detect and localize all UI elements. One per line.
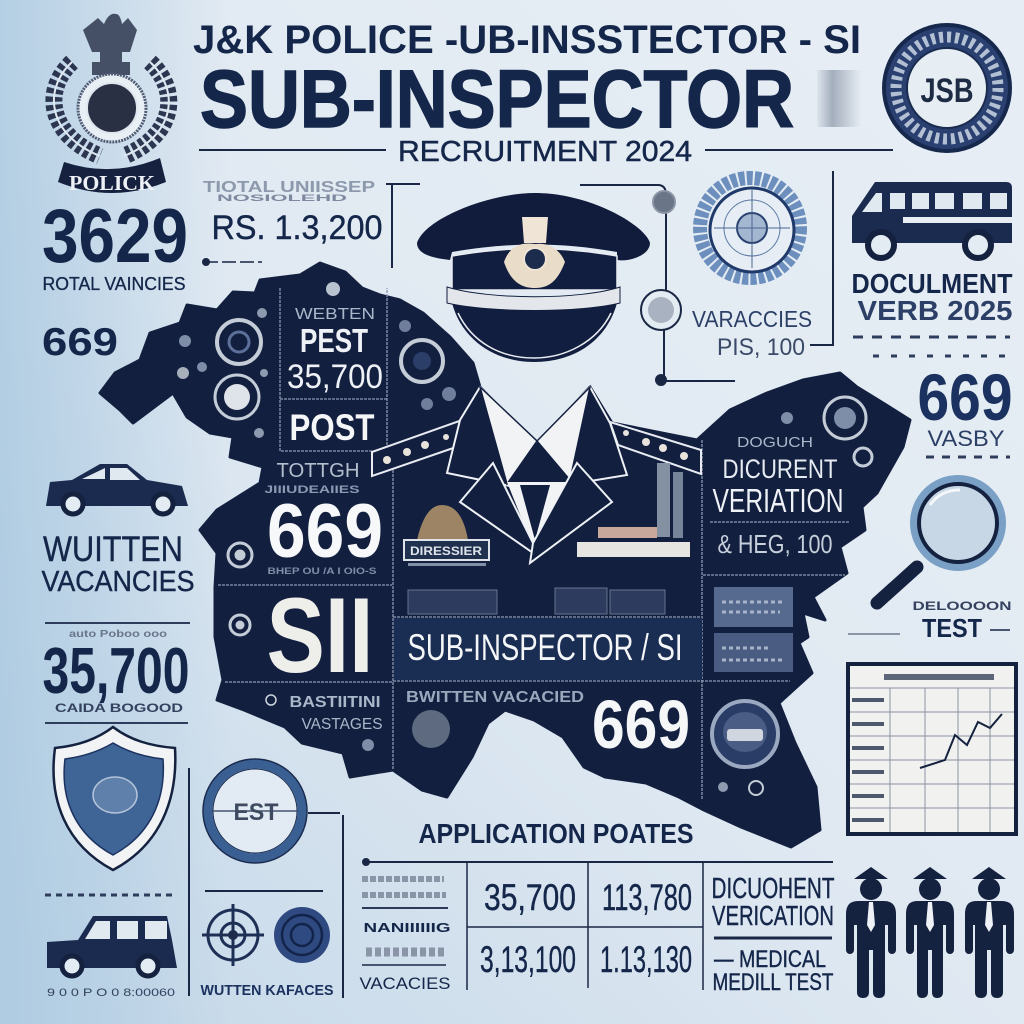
map panel: written vacancies small (266, 694, 382, 733)
stat: 669 left: 669 (42, 321, 118, 364)
police emblem (54, 14, 169, 195)
stat: 35,700 left: CAIDA BOGOOD (55, 701, 183, 715)
officer figure 2 (906, 867, 954, 998)
target and fingerprint icons (202, 904, 330, 966)
officer figure 3 (965, 867, 1014, 998)
test label: DELOOOON (912, 599, 1012, 613)
document verification and medical test text: VERICATION (712, 900, 834, 931)
officer figure 1 (846, 867, 896, 998)
document verification label (852, 268, 1012, 356)
map panel: written post: POST (290, 407, 375, 448)
blue wreath seal (700, 178, 800, 278)
vacancies mid label (692, 306, 812, 361)
table values (480, 877, 692, 980)
divider left of test ring (189, 768, 340, 996)
written vacancies label (42, 530, 194, 598)
name plate and badge: DIRESSIER (410, 544, 482, 558)
map panel: written post (287, 306, 383, 448)
icon: three officers (846, 867, 1014, 998)
bracket beside vacancies (810, 171, 833, 345)
map panel: total vacancies: 669 (267, 489, 383, 574)
connector and small badges right of cap (580, 185, 735, 385)
laurel wreath (54, 62, 169, 156)
document verification and medical test text: MEDILL TEST (712, 969, 834, 996)
test ring icon: EST (234, 799, 279, 826)
vacancies mid label: VARACCIES (692, 306, 812, 332)
JSB seal (884, 25, 1010, 151)
title: J&K POLICE -UB-INSSTECTOR - SI (193, 18, 861, 62)
title: RECRUITMENT 2024 (398, 136, 692, 168)
map panel: total vacancies (264, 460, 383, 576)
document verification and medical test text: DICUOHENT (712, 873, 835, 905)
dashed rule above SUV (45, 894, 175, 896)
table row labels: VACACIES (360, 974, 450, 993)
map panel: total vacancies: TOTTGH (276, 460, 360, 482)
table values: 113,780 (602, 877, 692, 918)
vacancies mid label: PIS, 100 (717, 334, 805, 361)
stat: total vacancies: 3629 (42, 194, 188, 279)
map panel: written post: WEBTEN (295, 306, 375, 323)
written vacancies label: VACANCIES (42, 566, 194, 598)
map panel: document verification: & HEG, 100 (718, 529, 832, 559)
cap badge (504, 217, 565, 288)
table values: 3,13,100 (480, 939, 576, 980)
map panel: written post: 35,700 (287, 358, 383, 396)
table row labels: NANIIIIIIG (364, 920, 450, 935)
salary block: NOSIOLEHD (217, 193, 348, 203)
salary block (202, 179, 420, 268)
written vacancies label: WUITTEN (43, 530, 183, 569)
title (193, 18, 893, 168)
results table with line chart (848, 664, 1016, 834)
officer uniform (372, 387, 701, 614)
pocket flaps (408, 588, 665, 614)
application dates table (343, 815, 835, 998)
map panel: vacancies 669: 669 (592, 686, 690, 763)
map panel: vacancies 669 (406, 686, 778, 767)
stat: 35,700 left (42, 623, 190, 723)
stat: 35,700 left: auto Poboo ooo (69, 629, 167, 640)
table values: 1.13,130 (600, 939, 692, 980)
icon: car top (46, 464, 188, 514)
map panel: SI: SII (266, 575, 374, 695)
icon: SUV bottom (47, 916, 177, 976)
map panel: sub-inspector banner: SUB-INSPECTOR / SI (408, 627, 682, 668)
map panel: written vacancies small: BASTIITINI (290, 694, 380, 711)
name plate and badge (404, 505, 489, 566)
map panel: total vacancies: BHEP OU /A I OIO-S (268, 566, 376, 576)
icon: magnifying glass (877, 479, 1002, 603)
stat: 35,700 left: 35,700 (42, 634, 190, 707)
stat: 669 right: VASBY (928, 426, 1005, 451)
test ring icon (203, 759, 307, 863)
dotted caption under SUV: 9 0 0 P O 0 8:00060 (47, 987, 175, 999)
salary block: TIOTAL UNIISSEP (203, 179, 375, 196)
test label (848, 599, 1012, 643)
ashoka crown (83, 14, 137, 75)
map panel: vacancies 669: BWITTEN VACACIED (406, 689, 584, 706)
document verification and medical test text: — MEDICAL (714, 946, 826, 973)
map of Jammu and Kashmir silhouette (100, 263, 910, 847)
jacket lapels and collar (447, 387, 627, 563)
map banner tint (394, 618, 702, 680)
map panel: document verification: VERIATION (712, 482, 844, 519)
stat: total vacancies: ROTAL VAINCIES (42, 274, 186, 294)
shoulder epaulettes (372, 420, 701, 476)
police ribbon (58, 158, 166, 193)
document verification label: VERB 2025 (858, 295, 1012, 326)
map badges (177, 282, 872, 795)
map panel: total vacancies: JIIIUDEAIIES (264, 484, 360, 496)
map panel: written vacancies small: VASTAGES (302, 716, 382, 733)
document verification and medical test text (712, 873, 835, 996)
map panel: document verification: DICURENT (722, 454, 838, 484)
stat: 669 right (918, 360, 1012, 457)
icon: shield (54, 727, 175, 870)
title: SUB-INSPECTOR (200, 54, 794, 145)
salary block: RS. 1.3,200 (212, 209, 382, 247)
map panel: document verification: DOGUCH (737, 434, 813, 451)
icon: bus (852, 182, 1012, 258)
table row labels (360, 879, 450, 993)
table values: 35,700 (484, 877, 576, 918)
written vacancies small label: WUTTEN KAFACES (200, 982, 334, 999)
map panel dividers (218, 288, 850, 800)
medal ribbons (577, 463, 690, 557)
officer cap (417, 193, 650, 362)
police emblem: POLICK (69, 171, 156, 195)
application heading: APPLICATION POATES (418, 818, 694, 849)
JSB seal: JSB (920, 72, 974, 110)
map panel: written post: PEST (300, 322, 368, 359)
test label: TEST (922, 613, 982, 643)
map panel: document verification (712, 434, 844, 672)
